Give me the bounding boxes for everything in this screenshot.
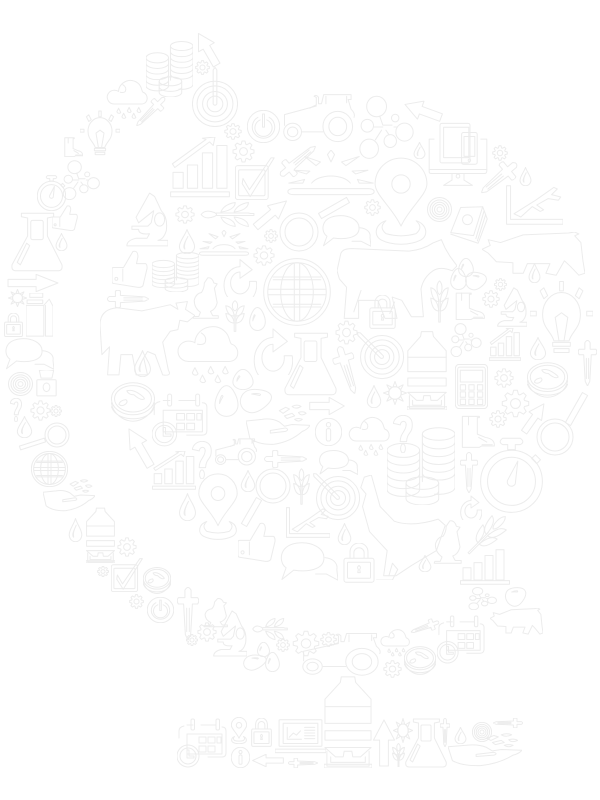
icon: rain cloud (178, 327, 238, 383)
icon: drop (520, 167, 531, 186)
icon: gear (321, 633, 336, 646)
icon: dropper (177, 588, 199, 640)
icon: sun (393, 718, 413, 742)
icon: gear (118, 538, 136, 556)
icon: drop (241, 470, 255, 492)
icon: chicken (204, 599, 227, 627)
icon: magnifier (241, 469, 290, 526)
icon: arrow (121, 424, 159, 471)
icon: globe (31, 451, 68, 487)
icon: dropper (274, 139, 322, 183)
icon: petri dish (527, 363, 568, 397)
icon: line chart (507, 186, 563, 224)
icon: milk carton (26, 293, 53, 336)
icon: checkbox (235, 158, 274, 200)
icon: microscope (498, 288, 527, 326)
icon: gear (293, 631, 319, 656)
icon: calendar and clock (177, 719, 226, 767)
icon: drop (180, 494, 195, 521)
icon: dropper (474, 155, 523, 201)
icon: flask (12, 213, 62, 271)
icon: question mark (10, 398, 22, 422)
icon: arrow (373, 720, 395, 766)
icon: calendar and clock (437, 616, 484, 663)
icon: pig (482, 232, 585, 275)
icon: gear (130, 595, 143, 608)
icon: gear (196, 61, 209, 74)
icon: speech bubbles (323, 216, 371, 246)
icon: petri dish (143, 568, 171, 593)
icon: box (37, 370, 56, 396)
icon: egg (451, 268, 466, 290)
icon: arrow (310, 397, 344, 415)
icon: map pin (231, 717, 247, 744)
icon: arrow (191, 29, 225, 70)
icon: gear (31, 401, 50, 420)
icon: microscope (127, 193, 168, 246)
icon: egg (502, 583, 530, 609)
icon: molecule (469, 587, 496, 610)
icon: gear (187, 635, 197, 645)
icon: gear (51, 406, 61, 416)
icon: dropper (288, 758, 318, 768)
icon: molecule (451, 324, 481, 357)
icon: thumbs up (238, 523, 275, 561)
icon: coins (146, 42, 193, 97)
globe stand base of icons (177, 677, 523, 768)
icon: hand with seeds (43, 480, 95, 511)
icon: padlock (344, 543, 374, 582)
icon: hand with seeds (246, 405, 310, 444)
icon: drop (529, 263, 540, 283)
icon: tractor (215, 439, 256, 465)
icon: question mark (393, 415, 412, 453)
icon: thumbs up (52, 206, 77, 231)
icon: padlock (5, 313, 22, 337)
icon: dropper (409, 616, 441, 638)
icon: dropper (107, 290, 149, 308)
icon: silo (407, 332, 447, 410)
icon: magnifier (537, 392, 588, 455)
icon: arrow (8, 274, 58, 292)
icon: refresh (224, 260, 257, 304)
icon: egg (459, 258, 473, 277)
icon: bar chart (489, 328, 521, 360)
icon: refresh (461, 496, 482, 524)
icon: gear (176, 206, 194, 223)
icon: flask (285, 333, 336, 395)
icon: light bulb (80, 111, 120, 155)
icon: target (298, 458, 368, 528)
icon: bar chart with arrow (171, 137, 229, 197)
icon: book (451, 207, 487, 243)
icon: hand with seeds (448, 734, 522, 766)
icon: flask (406, 719, 446, 767)
icon: line chart (286, 508, 330, 537)
icon: dropper (264, 450, 307, 468)
icon: arrow (253, 754, 283, 767)
globe sphere of icons (100, 95, 597, 584)
icon: wheat (393, 743, 404, 767)
icon: large silo (324, 677, 372, 768)
icon: sunrise (288, 150, 374, 195)
icon: cloud (381, 630, 409, 656)
icon: drop (338, 523, 351, 545)
icon: egg (215, 386, 238, 416)
icon: gear (502, 390, 529, 417)
icon: egg (238, 385, 274, 415)
icon: molecule (360, 96, 413, 158)
icon: devices (429, 123, 487, 185)
icon: coins (387, 428, 455, 505)
icon: checkbox (111, 559, 142, 592)
icon: cow (100, 302, 195, 375)
icon: refresh (254, 329, 293, 384)
icon: gear (98, 566, 108, 577)
icon: map pin (375, 158, 427, 244)
icon: info (231, 747, 250, 768)
icon: rain cloud (349, 417, 389, 455)
globe ring of icons (5, 29, 543, 677)
icon: speech bubbles (6, 339, 54, 369)
icon: calculator (455, 364, 488, 409)
icon: drop (367, 385, 381, 408)
icon: sunrise (200, 230, 248, 255)
icon: stopwatch (37, 176, 66, 211)
icon: bar chart (460, 550, 510, 584)
icon: gear (493, 146, 507, 160)
icon: gear (384, 661, 401, 677)
icon: map pin (199, 474, 237, 539)
icon: laptop (275, 720, 326, 753)
icon: rain cloud (107, 80, 147, 118)
icon: question mark (192, 441, 211, 479)
icon: chicken (193, 278, 218, 318)
icon: sun (8, 289, 27, 307)
icon: egg (242, 652, 268, 672)
icon: egg (250, 307, 265, 331)
icon: padlock (252, 718, 271, 746)
icon: bar chart (152, 451, 196, 489)
icon: dropper (460, 452, 478, 493)
icon: calendar and clock (152, 394, 207, 446)
icon: chicken (434, 521, 461, 563)
icon: drop (17, 416, 32, 438)
icon: hen (361, 475, 445, 580)
icon: dropper (578, 340, 597, 386)
icon: petri dish (111, 383, 155, 421)
icon: target (192, 67, 238, 127)
icon: drop (530, 337, 546, 360)
icon: drop (419, 555, 431, 572)
icon: magnifier (19, 423, 69, 450)
icon: coins (152, 252, 199, 292)
icon: speech bubbles (281, 543, 338, 580)
icon: drop (135, 351, 150, 377)
icon: egg (464, 269, 489, 292)
icon: wheat (294, 469, 309, 504)
icon: wheat (226, 301, 244, 331)
icon: silo (86, 508, 115, 563)
icon: thumbs up (112, 251, 147, 287)
icon: boot (456, 293, 484, 319)
icon: tractor (303, 633, 380, 675)
icon: pig (490, 608, 543, 634)
icon: tractor (284, 95, 354, 142)
icon: power button (247, 110, 280, 143)
icon: drop (455, 727, 466, 744)
icon: spiral target (8, 372, 32, 396)
icon: gear (483, 291, 499, 307)
icon: boot (65, 138, 83, 157)
icon: gear (277, 639, 289, 651)
icon: gear (265, 230, 277, 242)
icon: globe (264, 259, 330, 325)
icon: speech bubble (320, 451, 358, 474)
icon: stopwatch (481, 438, 542, 512)
icon: wheat (431, 281, 448, 322)
icon: info (315, 418, 342, 446)
icon: gear (254, 246, 274, 265)
icon: gear (495, 279, 506, 290)
icon: gear (198, 623, 216, 641)
icon: wheat sprig (462, 510, 512, 560)
icon: gear (225, 124, 241, 139)
icon: egg (258, 642, 269, 657)
icon: sun (383, 381, 407, 405)
icon: gear (495, 369, 513, 387)
icon: drop (69, 518, 82, 542)
icon: drop (414, 142, 425, 159)
icon: wheat sprig (201, 202, 254, 226)
icon: microscope (214, 611, 247, 656)
icon: drop (56, 233, 67, 251)
icon: wheat sprig (253, 618, 287, 640)
icon: power button (147, 597, 174, 623)
icon: dropper (440, 718, 450, 747)
icon: gear (233, 141, 254, 162)
icon: arrow (250, 194, 292, 234)
icon: drop (179, 230, 195, 254)
icon: arrow (518, 399, 550, 437)
icon: magnifier (280, 197, 350, 251)
icon: spiral target (472, 722, 492, 742)
icon: arrow (402, 95, 444, 127)
icon: petri dish (404, 647, 436, 674)
icon: egg (233, 369, 253, 390)
icon: padlock (370, 295, 395, 328)
icon: gear (365, 200, 380, 215)
icon: gear (336, 321, 357, 344)
icon: dropper (329, 343, 365, 397)
icon: dropper (493, 718, 523, 728)
icon: egg (266, 652, 279, 672)
icon: light bulb (530, 282, 593, 353)
icon: spiral target (428, 198, 452, 222)
icon: dropper (131, 93, 170, 131)
icon: gear (490, 411, 506, 427)
icon: boot (462, 416, 494, 447)
icon: molecule (63, 161, 99, 200)
icon: target (342, 317, 412, 387)
icon: cow (337, 240, 457, 318)
